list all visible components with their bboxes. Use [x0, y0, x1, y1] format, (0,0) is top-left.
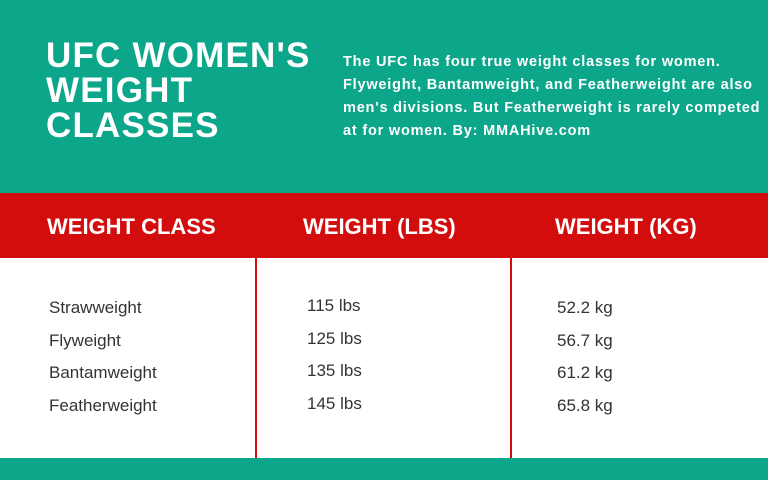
header: weight lbs: WEIGHT (LBS)	[303, 214, 456, 239]
footer band	[0, 458, 768, 480]
title	[46, 36, 311, 145]
column: weight classes: Featherweight	[49, 396, 157, 415]
column: lbs	[307, 296, 362, 413]
column: kg: 61.2 kg	[557, 363, 613, 382]
column: kg	[557, 298, 613, 415]
column: weight classes: Strawweight	[49, 298, 142, 317]
column: lbs: 125 lbs	[307, 329, 362, 348]
column: kg: 65.8 kg	[557, 396, 613, 415]
column: lbs: 145 lbs	[307, 394, 362, 413]
column: weight classes	[49, 298, 157, 415]
intro text: The UFC has four true weight classes for women.	[343, 54, 721, 70]
intro text: Flyweight, Bantamweight, and Featherweight are also	[343, 77, 753, 93]
header: weight class: WEIGHT CLASS	[47, 214, 216, 239]
column: weight classes: Bantamweight	[49, 363, 157, 382]
column: kg: 52.2 kg	[557, 298, 613, 317]
header panel	[0, 0, 768, 193]
column: weight classes: Flyweight	[49, 331, 121, 350]
title: WEIGHT	[46, 71, 193, 110]
header: weight kg: WEIGHT (KG)	[555, 214, 697, 239]
intro text: men's divisions. But Featherweight is rarely competed	[343, 100, 760, 116]
column: kg: 56.7 kg	[557, 331, 613, 350]
intro text: at for women. By: MMAHive.com	[343, 123, 591, 139]
intro text	[343, 54, 760, 139]
column: lbs: 115 lbs	[307, 296, 361, 315]
column: lbs: 135 lbs	[307, 361, 362, 380]
title: CLASSES	[46, 106, 220, 145]
title: UFC WOMEN'S	[46, 36, 311, 75]
table header band	[0, 193, 768, 258]
